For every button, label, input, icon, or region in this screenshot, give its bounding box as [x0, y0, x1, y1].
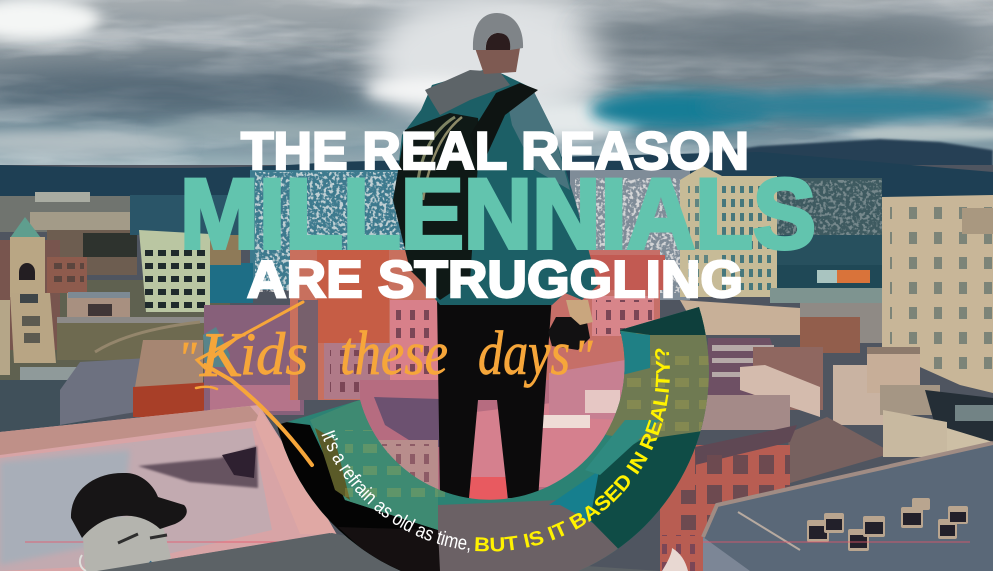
- neck and head: [475, 48, 520, 74]
- legs: [437, 296, 552, 500]
- camera: [548, 317, 590, 350]
- foreground: right rooftop with AC units: [703, 443, 993, 571]
- right city: low rooftop blocks: [788, 347, 993, 483]
- left city: green office block: [139, 230, 210, 312]
- shoes: [438, 498, 555, 542]
- hood: [425, 70, 510, 115]
- AC unit: [938, 519, 957, 539]
- centre city: rooftops under the figure: [360, 360, 630, 510]
- title line 3: ARE STRUGGLING: [247, 251, 743, 309]
- AC unit: [807, 520, 829, 542]
- hand-written quote: Kids these days: ": [178, 333, 197, 382]
- right city: red brick corner building: [660, 425, 797, 571]
- jacket: [398, 68, 598, 305]
- background: cloudy sky: [0, 0, 993, 175]
- hand-written quote: Kids these days: these: [340, 320, 448, 388]
- foreground: concrete ledge: [97, 533, 660, 571]
- hand-written quote: Kids these days: [178, 319, 593, 390]
- background: distant hills: [640, 139, 993, 200]
- title line 2: MILLENNIALS: MILLENNIALS: [180, 158, 816, 269]
- hand-written quote: Kids these days: K: [199, 319, 246, 390]
- inset portrait: man in black cap: [71, 473, 187, 571]
- hand-written quote: Kids these days: days: [478, 320, 570, 388]
- hand-drawn K swash: [196, 302, 312, 465]
- cap: [473, 13, 523, 50]
- left city: clock tower: [0, 217, 87, 380]
- centre city: red brick blocks: [290, 250, 665, 400]
- hand: [566, 300, 593, 325]
- AC unit: [912, 498, 930, 510]
- hand-written quote: Kids these days: ids: [240, 321, 308, 387]
- title line 1: THE REAL REASON: [241, 122, 749, 181]
- curved caption text: It’s a refrain as old as time,: [322, 430, 470, 553]
- right city: mid-distance buildings: [680, 265, 885, 430]
- background: city base: [0, 152, 993, 571]
- right city: cream tower: [680, 166, 777, 297]
- thin pink guide line: [25, 541, 970, 543]
- AC unit: [863, 516, 885, 537]
- ledge in front of portrait: [97, 533, 345, 571]
- left city: rooftops: [0, 305, 304, 435]
- backpack: [393, 113, 480, 300]
- AC unit: [848, 529, 869, 551]
- figure: standing man seen from behind: [393, 13, 598, 542]
- curved banner band: [270, 300, 710, 571]
- right city: tall beige apartment block: [882, 195, 993, 393]
- AC unit: [948, 506, 968, 524]
- curved caption highlight: BUT IS IT BASED IN REALITY?: [475, 348, 670, 552]
- AC unit: [824, 513, 844, 533]
- hand-written quote: Kids these days: ": [574, 331, 593, 380]
- left city: brick and low buildings: [47, 257, 213, 360]
- AC unit: [901, 507, 923, 528]
- foreground: left rooftop: [0, 405, 337, 571]
